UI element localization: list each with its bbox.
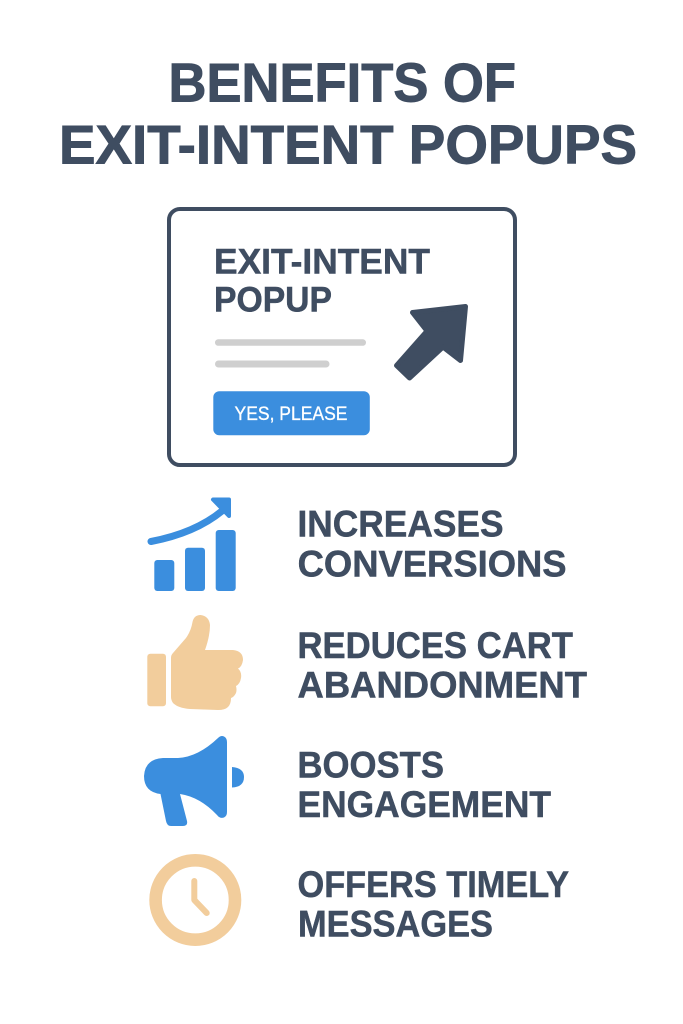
benefit: increases conversions: [151, 500, 567, 591]
icon: thumbs up: [147, 615, 243, 710]
icon: clock: [156, 860, 235, 940]
label: REDUCES CART: [298, 624, 573, 666]
popup illustration: [169, 209, 515, 465]
popup heading: EXIT-INTENT: [214, 242, 430, 282]
placeholder lines: [215, 339, 366, 368]
label: [298, 744, 551, 825]
label: ENGAGEMENT: [298, 783, 551, 825]
icon: growth chart: [151, 500, 236, 591]
label: CONVERSIONS: [298, 543, 567, 585]
label: OFFERS TIMELY: [298, 863, 569, 905]
icon: arrow: [396, 306, 466, 378]
button: [213, 391, 370, 435]
benefit: boosts engagement: [144, 736, 551, 826]
label: ABANDONMENT: [298, 664, 587, 706]
label: [298, 503, 567, 585]
popup heading: [214, 242, 430, 320]
benefit: offers timely messages: [156, 860, 569, 945]
title: [59, 52, 637, 176]
label: INCREASES: [298, 503, 504, 545]
button: YES, PLEASE: [234, 404, 348, 425]
title: BENEFITS OF: [168, 52, 516, 114]
popup heading: POPUP: [214, 280, 332, 320]
popup frame: [169, 209, 515, 465]
label: [298, 863, 569, 945]
icon: megaphone: [144, 736, 244, 826]
benefit: reduces cart abandonment: [147, 615, 587, 710]
label: [298, 624, 587, 706]
label: MESSAGES: [298, 903, 493, 945]
label: BOOSTS: [298, 744, 444, 786]
title: EXIT-INTENT POPUPS: [59, 114, 637, 176]
